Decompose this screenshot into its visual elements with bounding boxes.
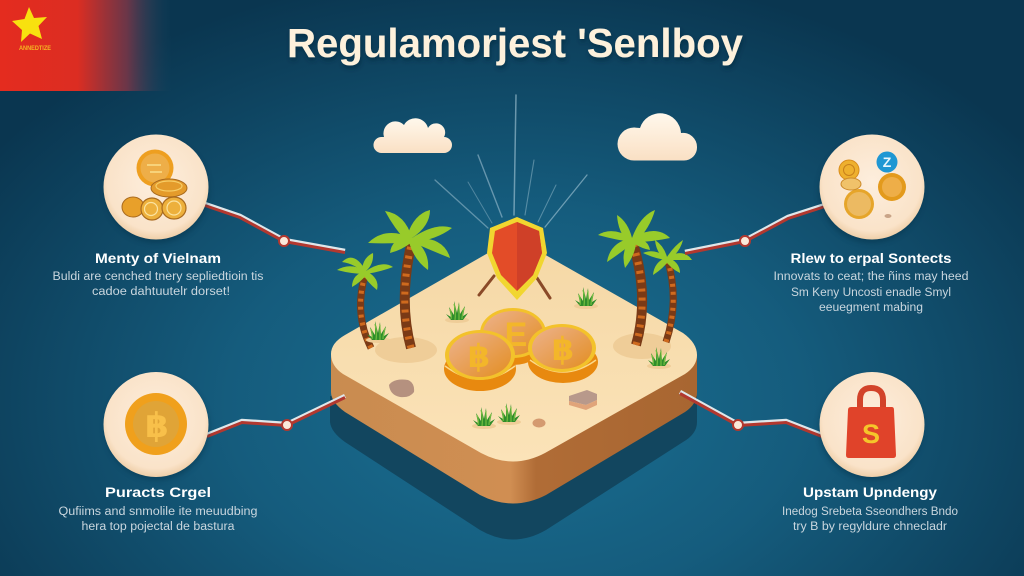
island platform bbox=[330, 243, 697, 540]
palm small left bbox=[337, 253, 393, 348]
flag corner bbox=[0, 0, 172, 91]
connector: bottom left bbox=[207, 396, 345, 436]
heading: Puracts Crgel bbox=[105, 485, 211, 500]
cloud right bbox=[618, 113, 697, 160]
icon: coin pile bbox=[104, 134, 208, 240]
sand patches bbox=[375, 333, 671, 363]
back coin bbox=[480, 308, 546, 365]
icon: bitcoin coin: ฿ bbox=[145, 406, 169, 446]
description: Inedog Srebeta Sseondhers Bndo bbox=[782, 506, 958, 518]
panel: bottom left bbox=[58, 372, 258, 533]
shield bbox=[479, 217, 550, 300]
description: Buldi are cenched tnery sepliedtioin tis bbox=[52, 271, 264, 283]
heading: Upstam Upndengy bbox=[803, 485, 938, 500]
rocks bbox=[389, 380, 597, 428]
description bbox=[782, 506, 958, 533]
shield legs bbox=[479, 276, 550, 298]
icon: red padlock bag: S bbox=[862, 419, 880, 449]
panel: top right bbox=[774, 134, 968, 314]
icon: crypto coins: Z bbox=[883, 154, 892, 170]
grass tufts bbox=[366, 287, 671, 429]
heading: Menty of Vielnam bbox=[95, 251, 221, 266]
platform side bbox=[331, 354, 697, 504]
description: Sm Keny Uncosti enadle Smyl bbox=[791, 287, 951, 299]
palm tall left bbox=[368, 210, 452, 348]
description: Innovats to ceat; the ñins may heed bbox=[774, 271, 968, 283]
platform sand top bbox=[331, 243, 697, 462]
description bbox=[774, 271, 968, 314]
panel: top left bbox=[52, 134, 264, 298]
shield body bbox=[487, 217, 547, 300]
heading: Rlew to erpal Sontects bbox=[790, 251, 952, 266]
light rays bbox=[435, 95, 587, 228]
palm tall right bbox=[598, 210, 670, 345]
connector: bottom right bbox=[680, 392, 822, 436]
description: Qufiims and snmolile ite meuudbing bbox=[58, 506, 258, 518]
description: hera top pojectal de bastura bbox=[82, 521, 235, 533]
description: eeuegment mabing bbox=[819, 302, 923, 314]
panel: bottom right bbox=[782, 372, 958, 533]
back coin: E bbox=[505, 316, 527, 354]
icon: yellow star bbox=[12, 7, 47, 42]
right coin bbox=[528, 324, 598, 383]
right coin: ฿ bbox=[552, 330, 574, 368]
flag caption: ANNEDTIZE bbox=[19, 45, 52, 52]
title: Regulamorjest 'Senlboy bbox=[287, 20, 743, 66]
front coin: ฿ bbox=[468, 337, 490, 375]
platform shadow bbox=[330, 396, 697, 540]
icon: bitcoin coin bbox=[104, 372, 208, 477]
front coin bbox=[444, 330, 516, 391]
gold coins bbox=[444, 308, 598, 391]
cloud left bbox=[373, 118, 452, 153]
icon: crypto coins bbox=[820, 134, 924, 240]
connector: top left bbox=[205, 204, 345, 252]
description bbox=[52, 271, 264, 298]
description: try B by regyldure chnecladr bbox=[793, 521, 947, 533]
icon: red padlock bag bbox=[820, 372, 924, 477]
palm small right bbox=[643, 240, 692, 342]
description: cadoe dahtuutelr dorset! bbox=[92, 286, 230, 298]
description bbox=[58, 506, 258, 533]
connector: top right bbox=[685, 205, 825, 254]
